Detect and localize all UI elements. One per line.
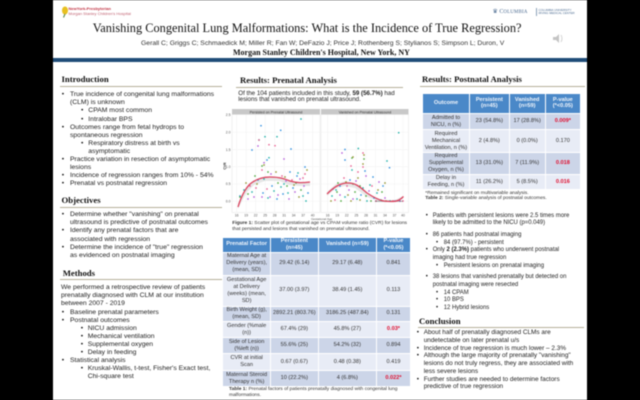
table 1: prenatal factors: 3186.25 (487.84) <box>326 310 369 316</box>
axis labels: 1.0 <box>226 165 231 169</box>
logo: Columbia University: IRVING MEDICAL CENTER <box>538 11 575 15</box>
table 1: prenatal factors: 37.00 (3.97) <box>279 287 309 293</box>
logo: Columbia University: ♛ COLUMBIA <box>492 9 528 15</box>
text: introduction bullets: • <box>81 140 83 147</box>
text: postnatal findings: imaging had true regression <box>433 255 506 261</box>
table 2: postnatal outcomes: 5 (8.5%) <box>517 179 538 185</box>
table 1: prenatal factors: (weeks) (mean, <box>227 291 266 297</box>
table 2: postnatal outcomes: Persistent <box>476 97 503 103</box>
text: objectives bullets: • <box>62 227 64 234</box>
text: prenatal summary: Of the 104 patients included in this study, 59 (56.7%) had <box>238 90 395 96</box>
heading: Introduction: Introduction <box>62 74 109 84</box>
table 1: prenatal factors: Gender (%male <box>227 323 266 329</box>
table 1: prenatal factors: 0.113 <box>387 287 400 293</box>
text: conclusion bullets: • <box>417 376 419 383</box>
table 1: prenatal factors: Side of Lesion <box>229 339 264 345</box>
authors: Gerall C; Griggs C; Schmaedick M; Miller R; Fan W; DeFazio J; Price J; Rothenberg S; Stylianos S; Simpson L; Duron, V <box>141 40 504 47</box>
text: introduction bullets: • <box>81 116 83 123</box>
axis labels: 25 <box>263 214 267 218</box>
table 1: prenatal factors: Maternal Steroid <box>226 372 267 378</box>
table 2: postnatal outcomes: 17 (28.8%) <box>514 118 541 124</box>
text: introduction bullets: spontaneous regression <box>70 132 143 139</box>
axis labels: 25 <box>355 214 358 218</box>
text: introduction bullets: Prenatal vs postnatal regression <box>70 180 167 187</box>
text: introduction bullets: • <box>62 180 64 187</box>
axis labels: 40 <box>401 214 405 218</box>
text: postnatal findings: likely to be admitted to the NICU (p=0.049) <box>433 220 545 226</box>
axis labels: 2.5 <box>226 113 231 117</box>
text: conclusion bullets: • <box>417 352 419 359</box>
table 2: postnatal outcomes: Mechanical <box>432 138 460 144</box>
table 2: postnatal outcomes: 0.009* <box>555 118 571 124</box>
text: postnatal findings: • <box>426 274 428 280</box>
table 2: postnatal outcomes: (n=59) <box>519 103 536 109</box>
table 2: postnatal outcomes: Ventilation, n (%) <box>425 145 467 151</box>
axis labels: 34 <box>383 214 387 218</box>
table 2: postnatal outcomes: Delay in <box>436 175 456 181</box>
text: methods: prenatally diagnosed with CLM at our institution <box>61 292 204 299</box>
table 2: postnatal outcomes: P-value <box>553 97 573 103</box>
text: postnatal findings: • <box>436 290 438 296</box>
table 2: postnatal outcomes: Outcome <box>434 100 458 106</box>
institution: Morgan Stanley Children's Hospital, New York, NY <box>233 48 410 57</box>
caption: table 1: malformations. <box>229 393 261 398</box>
text: introduction bullets: Outcomes range from fetal hydrops to <box>70 124 184 131</box>
table 2: postnatal outcomes: Supplemental <box>429 160 463 166</box>
axis labels: 0.0 <box>226 200 231 204</box>
text: objectives bullets: • <box>62 211 64 218</box>
table 2: postnatal outcomes: 0.018 <box>556 160 570 166</box>
panel: vanished lesions <box>321 109 408 212</box>
text: methods <box>60 284 210 380</box>
table 1: prenatal factors: at Delivery <box>233 284 260 290</box>
table 1: prenatal factors: 67.4% (29) <box>281 326 308 332</box>
text: postnatal findings: • <box>436 240 438 246</box>
text: methods: • <box>62 309 64 316</box>
heading: Methods: Methods <box>63 268 95 278</box>
table 2: postnatal outcomes: NICU, n (%) <box>431 122 461 128</box>
text: conclusion bullets: • <box>417 329 419 336</box>
axis labels: 22 <box>345 214 349 218</box>
table 1: prenatal factors: Prenatal Factor <box>226 241 267 247</box>
text: introduction bullets: • <box>62 172 64 179</box>
axis labels: 34 <box>292 214 296 218</box>
axis labels: 37 <box>393 214 396 218</box>
text: methods: Supplemental oxygen <box>88 341 153 348</box>
axis labels: 1.5 <box>226 148 231 152</box>
table 1: prenatal factors: 45.8% (27) <box>334 326 361 332</box>
text: conclusion bullets: Although the large majority of prenatally "vanishing" <box>424 352 571 359</box>
caption: figure 1 <box>232 220 408 232</box>
text: conclusion bullets: predictive of true regression <box>424 383 503 390</box>
table 1: prenatal factors: 0.131 <box>386 310 400 316</box>
table 2: postnatal outcomes: 13 (31.0%) <box>476 160 503 166</box>
table 1: prenatal factors: CVR at initial <box>230 355 263 361</box>
text: objectives bullets: Determine the incidence of "true" regression <box>70 244 203 251</box>
axis labels: 19 <box>335 214 339 218</box>
table 1: prenatal factors: 0.841 <box>386 260 400 266</box>
text: postnatal findings: 84 (97.7%) - persistent <box>444 240 504 246</box>
text: methods: • <box>81 333 83 340</box>
table 2: postnatal outcomes: Feeding, n (%) <box>428 182 464 188</box>
logo: Columbia University <box>492 8 575 16</box>
caption: table 1 <box>228 386 398 398</box>
caption: table 2 <box>424 190 547 201</box>
text: methods: Mechanical ventilation <box>88 333 155 340</box>
table 1: prenatal factors: 0.894 <box>386 342 400 348</box>
text: introduction bullets: (CLM) is unknown <box>70 99 125 106</box>
text: methods: We performed a retrospective review of patients <box>61 284 205 291</box>
panel: vanished lesions: Vanished on Prenatal Ultrasound <box>339 110 391 114</box>
table 2: postnatal outcomes: (n=45) <box>481 103 498 109</box>
table 1: prenatal factors: Scan <box>240 362 253 368</box>
table 1: prenatal factors: 10 (22.2%) <box>281 375 308 381</box>
text: conclusion bullets: undetectable on later prenatal u/s <box>424 337 519 344</box>
table 2: postnatal outcomes: Required <box>435 153 457 159</box>
axis labels: 0.5 <box>226 182 231 186</box>
axis labels: 22 <box>254 214 258 218</box>
table 1: prenatal factors: 29.17 (6.48) <box>332 260 362 266</box>
table 2: postnatal outcomes: 0.170 <box>556 138 570 144</box>
text: methods: • <box>62 317 64 324</box>
text: postnatal findings <box>425 212 570 312</box>
text: objectives bullets: • <box>62 244 64 251</box>
text: objectives bullets: Determine whether "vanishing" on prenatal <box>70 211 199 218</box>
table 1: prenatal factors: 4 (6.8%) <box>337 375 358 381</box>
heading: Results Postnatal: Results: Postnatal Analysis <box>422 74 522 84</box>
table 1: prenatal factors <box>222 237 411 386</box>
table 2: postnatal outcomes: Vanished <box>515 97 539 103</box>
text: introduction bullets: CPAM most common <box>88 107 152 114</box>
text: methods: Chi-square test <box>88 373 134 380</box>
text: methods: between 2007 - 2019 <box>61 300 125 307</box>
logo: NewYork-Presbyterian: Morgan Stanley Children's Hospital <box>68 11 131 16</box>
table 1: prenatal factors: (mean, SD) <box>232 314 261 320</box>
table 2: postnatal outcomes <box>422 93 581 189</box>
table 1: prenatal factors: 0.03* <box>387 326 400 332</box>
axis labels: 16 <box>326 214 330 218</box>
table 1: prenatal factors: Birth Weight (g), <box>226 307 267 313</box>
text: methods: Postnatal outcomes <box>70 317 130 324</box>
text: introduction bullets: Incidence of regression ranges from 10% - 54% <box>70 172 214 179</box>
table 2: postnatal outcomes: (*<0.05) <box>553 103 573 109</box>
table 1: prenatal factors: 0.67 (0.67) <box>281 359 308 365</box>
table 2: postnatal outcomes: 0 (0.0%) <box>517 138 538 144</box>
table 1: prenatal factors: 0.022* <box>385 375 402 381</box>
table 1: prenatal factors: (mean, SD) <box>232 267 261 273</box>
text: methods: • <box>81 325 83 332</box>
text: postnatal findings: 86 patients had postnatal imaging <box>433 232 521 238</box>
table 1: prenatal factors: (n=45) <box>286 245 303 251</box>
table 2: postnatal outcomes: 2 (4.8%) <box>479 138 500 144</box>
caption: figure 1: Figure 1: Scatter plot of gestational age vs CPAM volume ratio (CVR) for lesions <box>232 221 407 226</box>
text: postnatal findings: 14 CPAM <box>444 290 469 296</box>
text: postnatal findings: • <box>436 297 438 303</box>
table 1: prenatal factors: Gestational Age <box>227 277 266 283</box>
text: introduction bullets: True incidence of congenital lung malformations <box>70 91 214 98</box>
text: postnatal findings: Only 2 (2.3%) patients who underwent postnatal <box>433 247 559 253</box>
text: methods: • <box>81 341 83 348</box>
icon: speaker <box>552 34 563 43</box>
table 2: postnatal outcomes: Oxygen, n (%) <box>428 167 464 173</box>
caption: figure 1: that persisted and lesions that vanished on prenatal ultrasound. <box>232 227 370 232</box>
text: conclusion bullets: Incidence of true regression is much lower – 2.3% <box>424 345 566 352</box>
table 1: prenatal factors: (*<0.05) <box>383 245 404 251</box>
table 2: postnatal outcomes: Admitted to <box>432 115 460 121</box>
table 1: prenatal factors: 2892.21 (803.76) <box>273 310 316 316</box>
text: methods: NICU admission <box>88 325 137 332</box>
logo: NewYork-Presbyterian: NewYork-Presbyterian <box>68 6 111 11</box>
table 1: prenatal factors: 29.42 (6.14) <box>279 260 309 266</box>
table 1: prenatal factors: SD) <box>242 298 251 304</box>
table 1: prenatal factors: Delivery (years), <box>226 260 267 266</box>
text: methods: Delay in feeding <box>88 349 136 356</box>
table 1: prenatal factors: 38.49 (1.45) <box>332 287 362 293</box>
text: postnatal findings: 12 Hybrid lesions <box>444 305 489 311</box>
table 2: postnatal outcomes: Required <box>435 131 457 137</box>
text: prenatal summary: lesions that vanished on prenatal ultrasound. <box>238 96 361 103</box>
table 1: prenatal factors: 55.6% (25) <box>281 342 308 348</box>
text: methods: Statistical analysis <box>70 357 126 364</box>
text: prenatal summary <box>238 90 396 103</box>
text: introduction bullets: • <box>62 124 64 131</box>
caption: table 2: *Remained significant on multivariable analysis. <box>425 190 529 196</box>
table 1: prenatal factors: Persistent <box>281 238 308 244</box>
text: postnatal findings: • <box>426 247 428 253</box>
axis labels: 31 <box>374 214 377 218</box>
text: postnatal findings: • <box>426 213 428 219</box>
axis labels: Gestational Age <box>311 217 333 221</box>
heading: Conclusion: Conclusion <box>419 316 461 326</box>
text: conclusion bullets: • <box>417 345 419 352</box>
text: introduction bullets: • <box>62 91 64 98</box>
text: postnatal findings: Persistent lesions on prenatal imaging <box>444 263 544 269</box>
axis labels: 19 <box>244 214 248 218</box>
text: methods: • <box>81 349 83 356</box>
table 1: prenatal factors: (n)) <box>242 330 251 336</box>
axis labels: 2.0 <box>226 130 231 134</box>
logo: Columbia University: COLUMBIA UNIVERSITY <box>538 8 572 12</box>
heading: Objectives: Objectives <box>62 195 101 205</box>
heading: Results Prenatal: Results: Prenatal Analysis <box>240 74 337 84</box>
table 1: prenatal factors: 0.48 (0.38) <box>334 359 361 365</box>
text: introduction bullets: • <box>62 156 64 163</box>
text: introduction bullets: lesions <box>70 164 91 171</box>
table 1: prenatal factors: P-value <box>384 238 403 244</box>
text: postnatal findings: postnatal imaging were resected <box>433 282 518 288</box>
panel: persisted lesions <box>232 109 320 212</box>
text: introduction bullets: Respiratory distress at birth vs <box>88 140 180 147</box>
text: conclusion bullets: About half of prenatally diagnosed CLMs are <box>424 329 551 336</box>
text: introduction bullets <box>61 90 214 188</box>
table 2: postnatal outcomes: 0.016 <box>556 179 570 185</box>
table 1: prenatal factors: Maternal Age at <box>227 253 266 259</box>
text: methods: • <box>62 357 64 364</box>
text: introduction bullets: • <box>81 107 83 114</box>
text: postnatal findings: 10 BPS <box>444 297 464 303</box>
text: postnatal findings: • <box>436 263 438 269</box>
text: methods: Baseline prenatal parameters <box>70 309 159 316</box>
axis labels: 40 <box>311 214 315 218</box>
axis labels: 28 <box>364 214 368 218</box>
caption: table 1: Table 1: Prenatal factors of patients prenatally diagnosed with congenital lung <box>229 387 397 392</box>
panel: persisted lesions: Persisted on Prenatal Ultrasound <box>250 110 302 114</box>
chart: scatter plot of gestational age vs CVR <box>222 108 409 221</box>
text: objectives bullets: associated with regression <box>70 236 150 243</box>
text: conclusion bullets: less severe lesions <box>424 368 478 375</box>
axis labels: 31 <box>282 214 286 218</box>
text: methods: • <box>81 365 83 372</box>
table 2: postnatal outcomes: 7 (11.9%) <box>515 160 539 166</box>
text: objectives bullets <box>61 210 208 260</box>
text: conclusion bullets: lesions do not truly regress, they are associated with <box>424 360 573 367</box>
axis labels: 37 <box>301 214 305 218</box>
axis labels <box>223 113 405 221</box>
text: introduction bullets: Practice variation in resection of asymptomatic <box>70 156 210 163</box>
table 1: prenatal factors: 0.419 <box>386 359 400 365</box>
text: conclusion bullets <box>416 328 574 390</box>
logo: NewYork-Presbyterian <box>61 6 132 18</box>
axis labels: 28 <box>273 214 277 218</box>
table 1: prenatal factors: Therapy n (%) <box>229 379 264 385</box>
text: objectives bullets: Identify any prenatal factors that are <box>70 227 178 234</box>
text: introduction bullets: Intralobar BPS <box>88 116 132 123</box>
axis labels: 16 <box>235 214 239 218</box>
title: Vanishing Congenital Lung Malformations: What is the Incidence of True Regression? <box>93 21 522 35</box>
text: objectives bullets: as evidenced on postnatal imaging <box>70 252 175 259</box>
text: postnatal findings: • <box>426 232 428 238</box>
text: postnatal findings: Patients with persistent lesions were 2.5 times more <box>433 213 569 219</box>
text: postnatal findings: 38 lesions that vanished prenatally but detected on <box>433 274 566 280</box>
caption: table 2: Table 2: Single-variable analysis of postnatal outcomes. <box>425 196 547 201</box>
text: introduction bullets: asymptomatic <box>88 148 130 155</box>
table 2: postnatal outcomes: 23 (54.8%) <box>476 118 503 124</box>
table 2: postnatal outcomes: 11 (26.2%) <box>476 179 503 185</box>
axis labels: CVR <box>223 162 227 170</box>
text: postnatal findings: • <box>436 305 438 311</box>
text: objectives bullets: ultrasound is predictive of postnatal outcomes <box>70 219 208 226</box>
table 1: prenatal factors: (%left (n)) <box>234 346 259 352</box>
text: conclusion bullets: Further studies are needed to determine factors <box>424 376 560 383</box>
table 1: prenatal factors: Vanished (n=59) <box>326 241 369 247</box>
table 1: prenatal factors: 54.2% (32) <box>334 342 361 348</box>
text: methods: Kruskal-Wallis, t-test, Fisher's Exact test, <box>88 365 210 372</box>
